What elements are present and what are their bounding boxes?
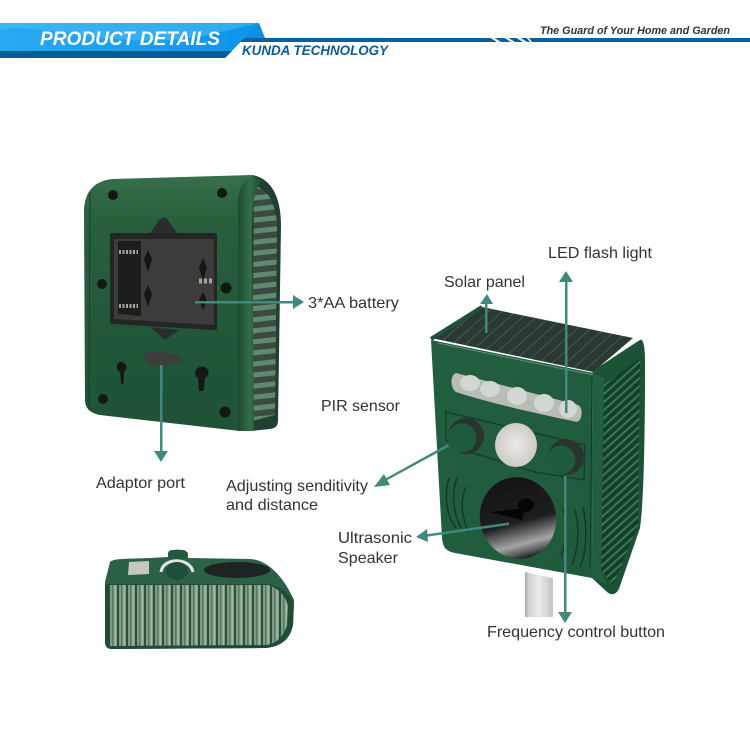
PIR sensor lens [495,423,537,467]
LED strip [452,373,582,422]
arrow: adaptor port [154,365,168,462]
label: solar panel: Solar panel [444,274,525,291]
battery compartment [110,218,217,340]
adaptor port cover [143,351,182,366]
pole [525,572,553,617]
speaker [471,469,565,567]
heading: tagline: The Guard of Your Home and Garden [540,25,730,37]
label: battery: 3*AA battery [308,295,399,312]
label: ultrasonic speaker: Ultrasonic [338,530,412,547]
screw holes [97,188,232,418]
left knob [448,418,484,454]
arrow: ultrasonic speaker [416,522,509,542]
device: back view [84,175,281,431]
label: adaptor port: Adaptor port [96,475,186,492]
solar panel [431,307,633,372]
device: front view [431,307,645,617]
device: bottom view [105,550,294,649]
label: adjusting sensitivity: Adjusting senditivity [226,478,368,495]
heading: company name: KUNDA TECHNOLOGY [242,42,390,58]
arrow: adjusting knob [374,444,449,487]
front face [431,340,593,578]
arrow: battery [195,295,304,309]
label: LED flash light: LED flash light [548,245,653,262]
arrow: frequency control [558,476,572,623]
label: frequency control button: Frequency control button [487,624,665,641]
heading: product details: PRODUCT DETAILS [40,29,220,50]
label: adjusting sensitivity: and distance [226,497,318,514]
control recess [446,412,585,480]
arrow: solar panel [480,294,493,333]
arrow: LED flash light [559,271,573,413]
label: PIR sensor: PIR sensor [321,398,401,415]
header banner [0,23,750,58]
sound grooves [446,478,586,567]
right knob [546,439,584,475]
side ribs [592,340,645,594]
label: ultrasonic speaker: Speaker [338,550,399,567]
